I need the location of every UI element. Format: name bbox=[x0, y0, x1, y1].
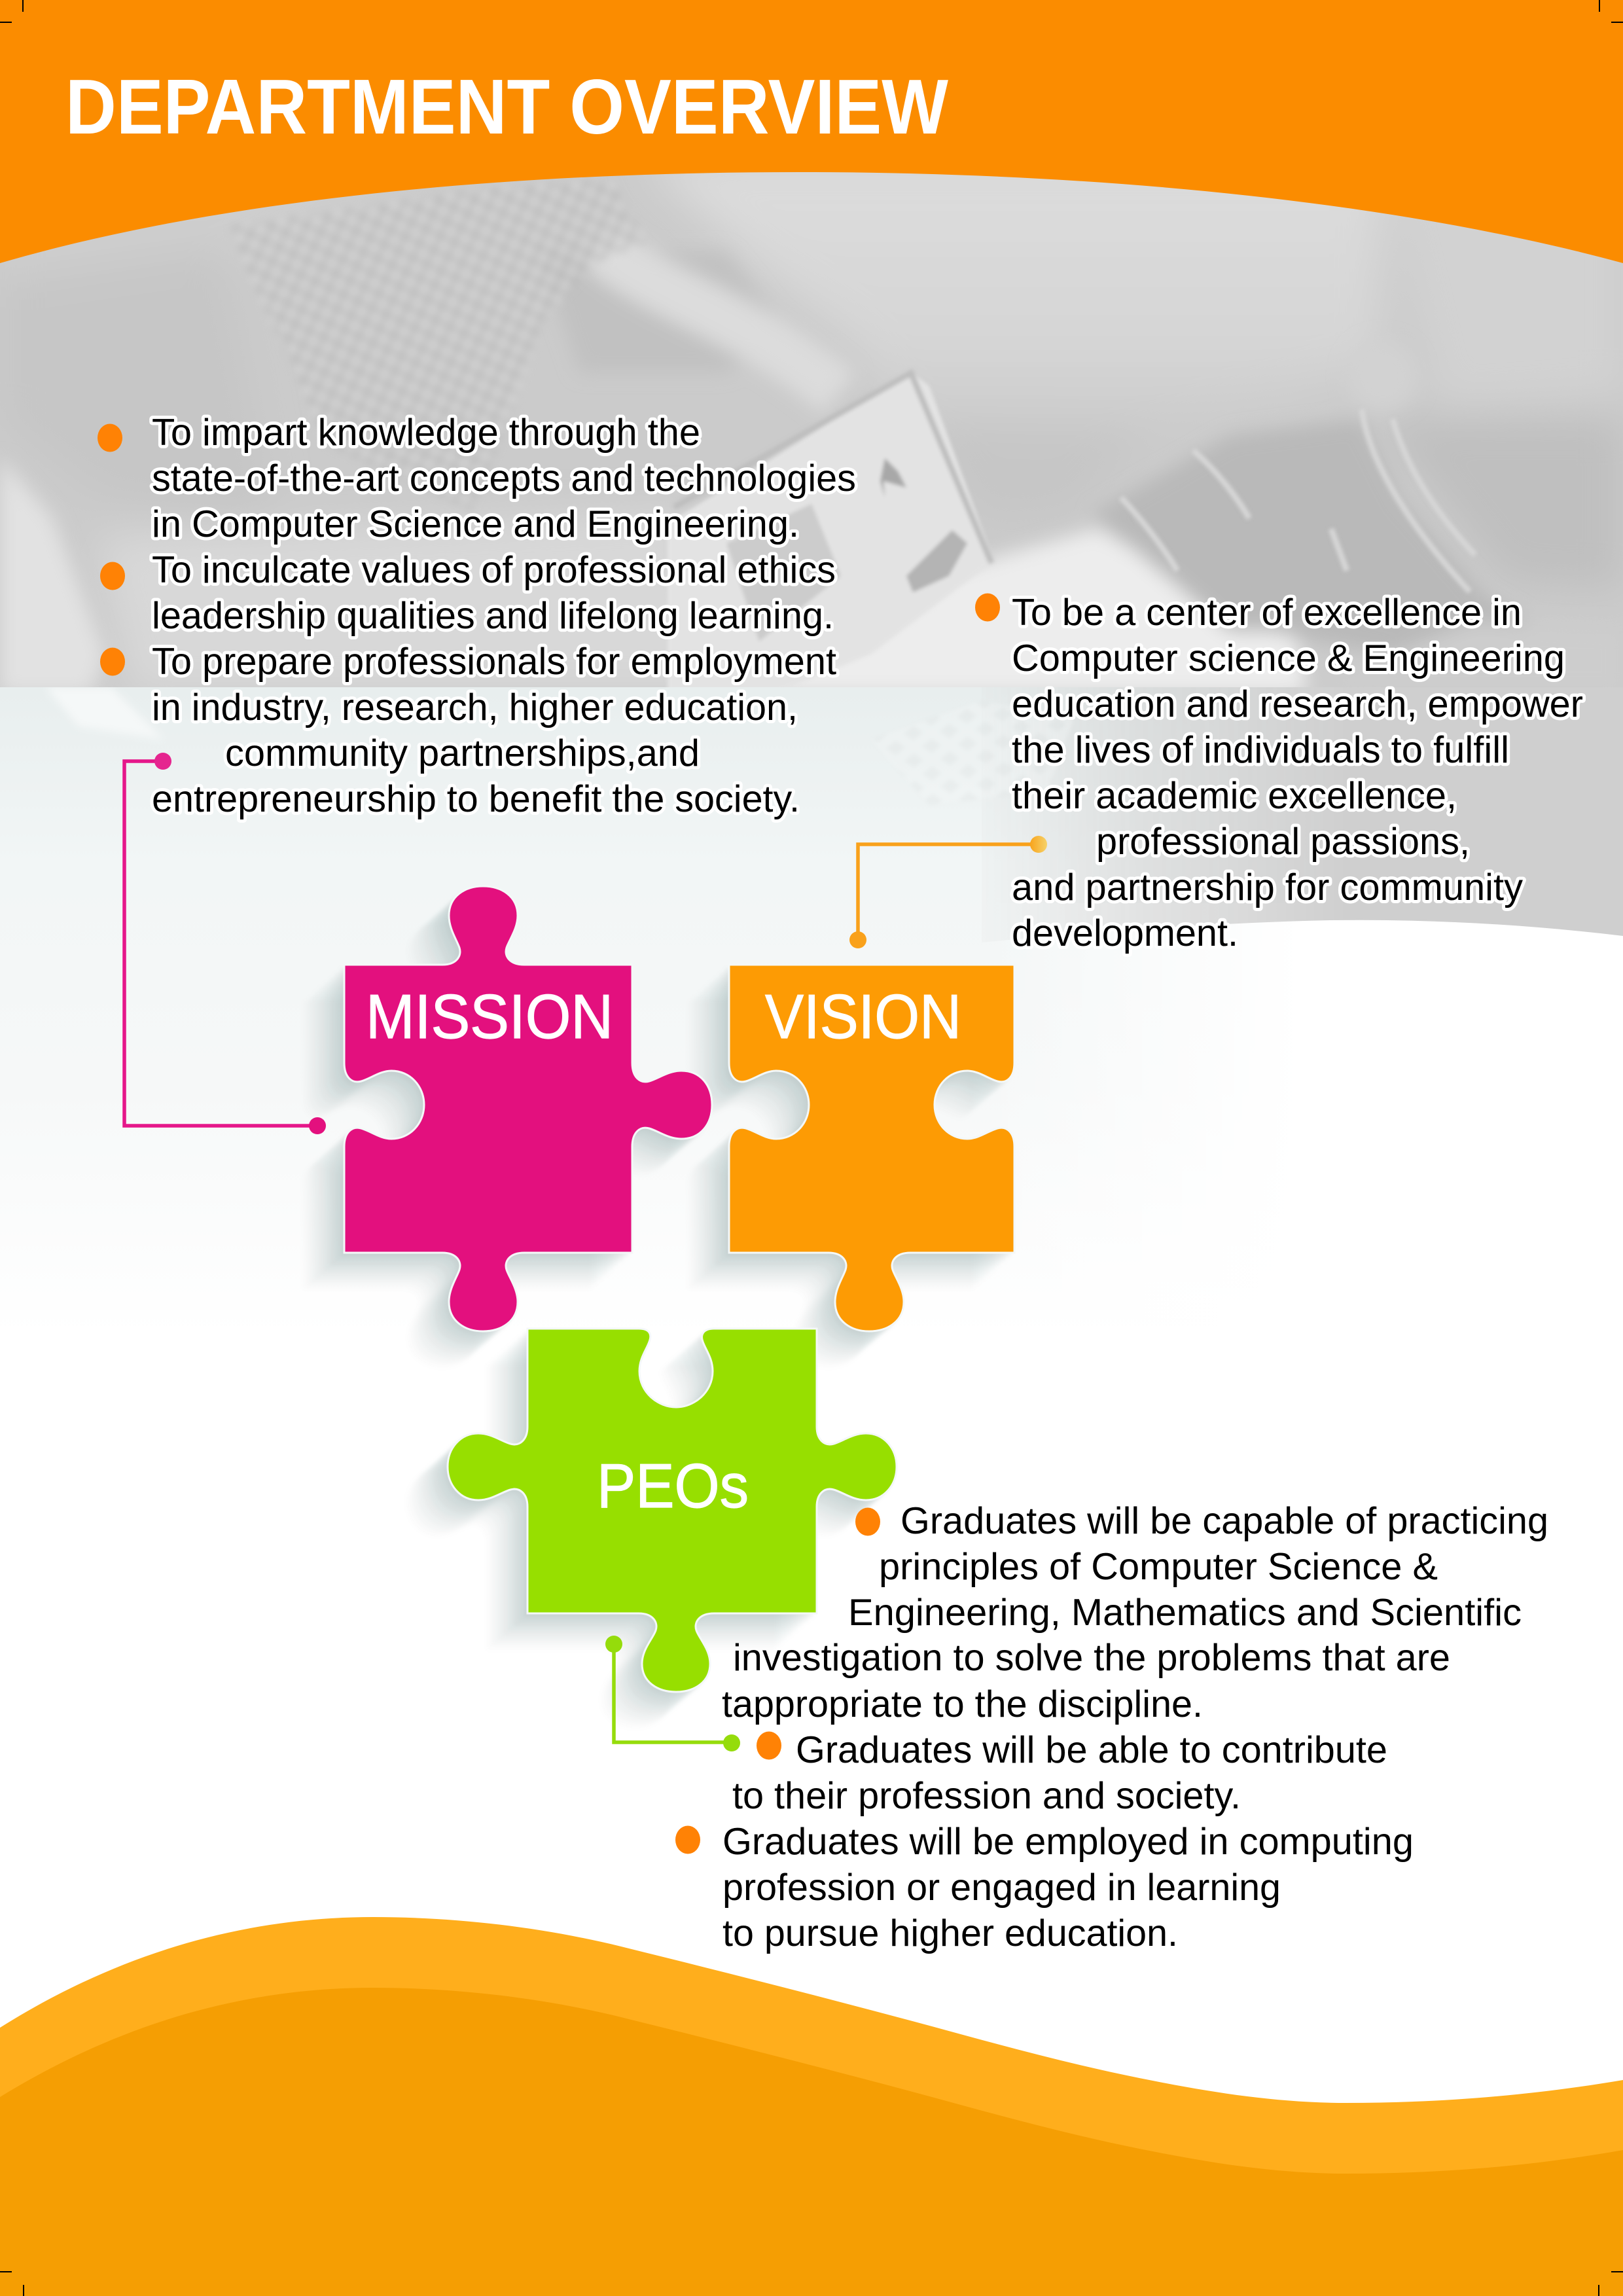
connector: vision bbox=[849, 836, 1047, 948]
lower-left highlight bbox=[46, 687, 164, 740]
vision text: development. bbox=[1012, 912, 1238, 954]
mission text: leadership qualities and lifelong learning. bbox=[152, 595, 834, 637]
title: DEPARTMENT OVERVIEW bbox=[65, 63, 949, 151]
vision text: To be a center of excellence in bbox=[1012, 592, 1522, 634]
puzzle piece: PEOs bbox=[448, 1329, 897, 1692]
PEOs text: to pursue higher education. bbox=[722, 1912, 1178, 1954]
mission text: To prepare professionals for employment bbox=[152, 641, 836, 683]
vision text: education and research, empower bbox=[1012, 683, 1583, 725]
mission bullets bbox=[98, 424, 125, 675]
white right-side fade bbox=[982, 903, 1623, 1407]
laptop base pattern bbox=[870, 700, 1073, 805]
vision text: professional passions, bbox=[1096, 821, 1470, 863]
PEOs text bbox=[722, 1500, 1548, 1954]
label: PEOs: PEOs bbox=[597, 1451, 749, 1521]
label: VISION: VISION bbox=[765, 982, 961, 1052]
PEOs text: Graduates will be employed in computing bbox=[722, 1821, 1414, 1863]
label: MISSION: MISSION bbox=[366, 982, 613, 1052]
vision text: and partnership for community bbox=[1012, 867, 1523, 908]
pale fade background bbox=[0, 687, 1623, 1407]
PEOs text: Graduates will be capable of practicing bbox=[901, 1500, 1548, 1542]
PEOs text: profession or engaged in learning bbox=[722, 1867, 1281, 1909]
vision text: the lives of individuals to fulfill bbox=[1012, 729, 1509, 771]
puzzle piece: VISION bbox=[729, 965, 1014, 1331]
PEOs text: investigation to solve the problems that are bbox=[733, 1637, 1450, 1679]
mission text: in Computer Science and Engineering. bbox=[152, 503, 799, 545]
vision text: Computer science & Engineering bbox=[1012, 637, 1565, 679]
mission text: entrepreneurship to benefit the society. bbox=[152, 778, 800, 820]
mission text: community partnerships,and bbox=[225, 732, 700, 774]
PEOs text: Engineering, Mathematics and Scientific bbox=[848, 1592, 1522, 1634]
vision text bbox=[1012, 592, 1583, 954]
vision bullet bbox=[975, 593, 1000, 622]
mission text: in industry, research, higher education, bbox=[152, 687, 798, 728]
connector: mission bbox=[124, 753, 326, 1134]
PEOs text: principles of Computer Science & bbox=[879, 1546, 1438, 1588]
bottom wave: light bbox=[0, 1917, 1623, 2296]
mission text: state-of-the-art concepts and technologies bbox=[152, 457, 856, 499]
bottom wave: dark bbox=[0, 1988, 1623, 2296]
puzzle piece: MISSION bbox=[344, 886, 712, 1331]
PEOs text: tappropriate to the discipline. bbox=[722, 1683, 1203, 1725]
PEOs bullets bbox=[675, 1508, 880, 1854]
mission text bbox=[152, 412, 856, 820]
mission text: To impart knowledge through the bbox=[152, 412, 700, 454]
background photo: lower right section bbox=[982, 687, 1623, 942]
connector: PEOs bbox=[605, 1636, 740, 1751]
PEOs text: Graduates will be able to contribute bbox=[796, 1729, 1387, 1771]
header banner bbox=[0, 0, 1623, 263]
mission text: To inculcate values of professional ethics bbox=[152, 549, 836, 591]
vision text: their academic excellence, bbox=[1012, 775, 1457, 817]
PEOs text: to their profession and society. bbox=[732, 1775, 1241, 1817]
puzzle shadows bbox=[304, 890, 1010, 1728]
background photo: upper section bbox=[0, 157, 1623, 694]
